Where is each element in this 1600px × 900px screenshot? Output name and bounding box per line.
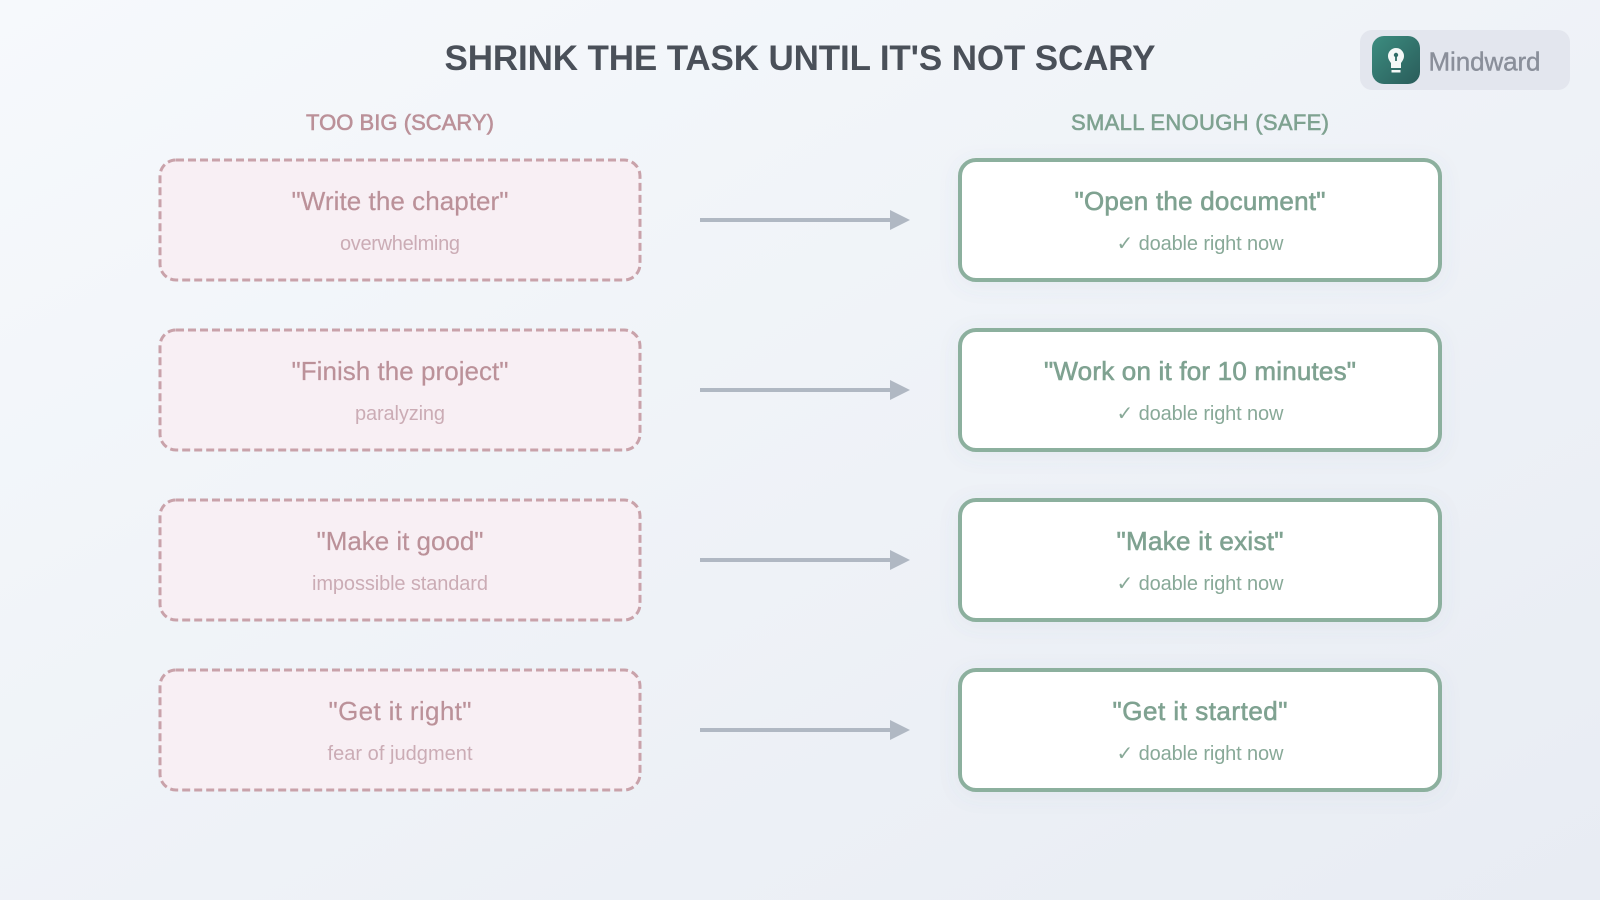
row 1: scary card: "Write the chapter" [292, 186, 508, 216]
row 4: safe card [960, 670, 1440, 790]
logo badge: Mindward [1360, 30, 1570, 90]
row 1: scary card [160, 160, 640, 280]
row 3: scary card [160, 500, 640, 620]
row 4: scary card [160, 670, 640, 790]
row 1: safe card [960, 160, 1440, 280]
brand name: Mindward [1428, 46, 1540, 76]
row 3: scary card: "Make it good" [316, 526, 484, 556]
row 1: arrow [700, 210, 910, 230]
row 3: safe card [960, 500, 1440, 620]
row 2: scary card: "Finish the project" [292, 356, 508, 386]
row 3: safe card: ✓ doable right now [1116, 573, 1284, 595]
row 2: safe card: ✓ doable right now [1116, 403, 1284, 425]
icon: lightbulb [1372, 36, 1420, 84]
row 4: safe card: "Get it started" [1112, 696, 1288, 726]
row 2: safe card [960, 330, 1440, 450]
row 1: safe card: "Open the document" [1074, 186, 1326, 216]
row 2: arrow [700, 380, 910, 400]
row 4: safe card: ✓ doable right now [1116, 743, 1284, 765]
row 3: scary card: impossible standard [312, 573, 488, 595]
column heading: too big: TOO BIG (SCARY) [306, 110, 494, 135]
title: SHRINK THE TASK UNTIL IT'S NOT SCARY [444, 39, 1156, 78]
row 4: arrow [700, 720, 910, 740]
row 3: arrow [700, 550, 910, 570]
row 2: scary card [160, 330, 640, 450]
column heading: small enough: SMALL ENOUGH (SAFE) [1071, 110, 1329, 135]
row 4: scary card: "Get it right" [328, 696, 472, 726]
row 4: scary card: fear of judgment [328, 743, 473, 765]
row 1: scary card: overwhelming [340, 233, 460, 255]
row 1: safe card: ✓ doable right now [1116, 233, 1284, 255]
row 2: scary card: paralyzing [355, 403, 445, 425]
row 2: safe card: "Work on it for 10 minutes" [1044, 356, 1356, 386]
row 3: safe card: "Make it exist" [1116, 526, 1284, 556]
